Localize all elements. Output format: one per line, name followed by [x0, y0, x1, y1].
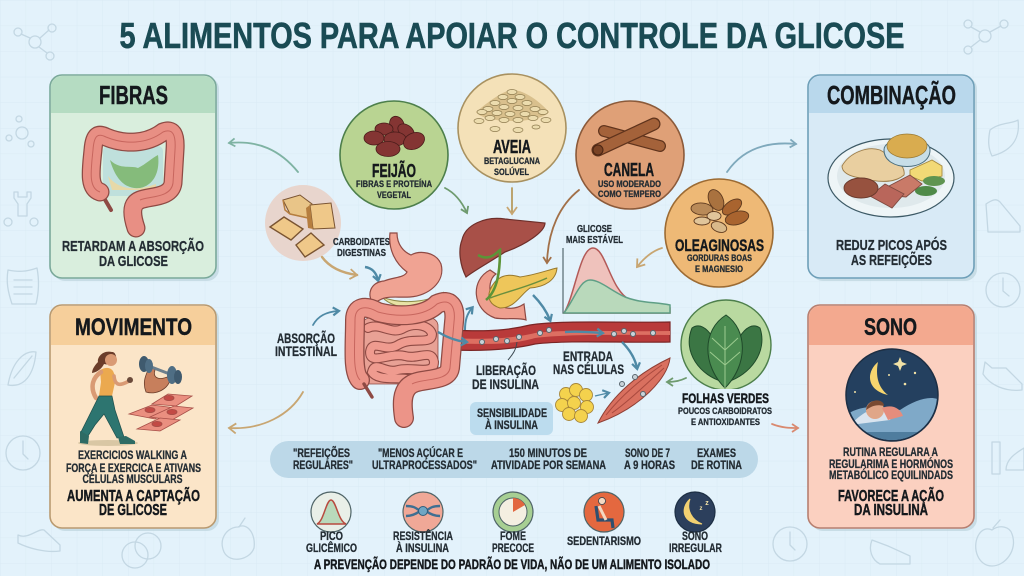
label: absorção intestinal: ABSORÇÃO [277, 331, 335, 346]
risk: sedentarismo: SEDENTARISMO [567, 536, 641, 548]
footer message: A PREVENÇÃO DEPENDE DO PADRÃO DE VIDA, NÃO DE UM ALIMENTO ISOLADO [314, 557, 710, 572]
text: oleaginosas: GORDURAS BOAS [687, 253, 752, 263]
text: oleaginosas [675, 236, 764, 274]
arrow: aveia to liver [511, 188, 513, 214]
habit: menos açúcar: "MENOS AÇÚCAR E [378, 447, 463, 460]
risk: resistência à insulina: À INSULINA [396, 542, 449, 555]
text: sono description [829, 445, 953, 482]
text: oleaginosas: OLEAGINOSAS [675, 236, 764, 255]
icon: balanced plate [828, 134, 954, 217]
text: movimento effect: DE GLICOSE [99, 502, 167, 519]
label: entrada nas células [553, 348, 624, 377]
text: movimento description: EXERCICIOS WALKING A [78, 448, 187, 462]
risk: sono irregular [669, 492, 723, 555]
icon: pancreas and duodenum [476, 250, 557, 320]
icon: cinnamon sticks [593, 124, 660, 155]
label: absorção intestinal [275, 331, 337, 359]
icon: colon with fibre gel [91, 131, 175, 228]
text: movimento effect [67, 485, 200, 519]
label: carboidates digestinas: CARBOIDATES [333, 237, 390, 248]
icon: nuts [691, 187, 750, 234]
habit: exames [691, 448, 742, 472]
arrow: pancreas to vessel [533, 295, 550, 320]
risk: pico glicêmico [306, 492, 357, 555]
text: sono description: REGULARIMA E HORMÓNOS [829, 456, 953, 471]
text: sono description: METABÓLICO EQUILINDADS [829, 467, 953, 482]
text: oleaginosas: E MAGNESIO [695, 264, 743, 274]
text: combinação effect: REDUZ PICOS APÓS [836, 236, 947, 254]
text: sono effect [838, 485, 944, 519]
arrow: fat to muscle [595, 393, 608, 396]
food: folhas verdes [678, 300, 772, 428]
text: aveia: BETAGLUCANA [484, 156, 540, 167]
callout: sensibilidade à insulina: SENSIBILIDADE [477, 408, 547, 420]
chart: glicose curves [563, 224, 670, 313]
habit: atividade: 150 MINUTOS DE [509, 448, 587, 460]
risk: sono irregular: IRREGULAR [669, 543, 723, 555]
food circle: carboidratos [265, 185, 341, 261]
icon: arm with dumbbell [139, 356, 182, 393]
arrow: to movimento [229, 392, 303, 428]
text: sono description: RUTINA REGULARA A [843, 445, 938, 459]
arrow: intestine to vessel [438, 332, 466, 342]
habit: atividade [491, 448, 606, 472]
pointer: insulin to vessel [508, 342, 517, 360]
label: glicose mais estável: GLICOSE [577, 224, 612, 235]
text: folhas verdes: POUCOS CARBOIDRATOS [678, 406, 772, 417]
icon: sleeping person at night [846, 349, 940, 445]
text: canela: USO MODERADO [598, 179, 661, 190]
text: feijão [356, 160, 432, 201]
text: fibras effect: RETARDAM A ABSORÇÃO [62, 237, 204, 255]
label: entrada nas células: ENTRADA [563, 348, 613, 364]
arrow: flow in vessel [565, 332, 602, 333]
risk: resistência à insulina: RESISTÊNCIA [393, 530, 453, 543]
risk: pico glicêmico: GLICÊMICO [306, 542, 357, 555]
icon: muscle [598, 358, 670, 423]
arrow: to combinação [727, 143, 796, 172]
text: sono effect: FAVORECE A AÇÃO [838, 485, 944, 505]
arrow: carbs to stomach [322, 257, 357, 275]
text: canela [598, 160, 661, 200]
habit: refeições regulares [293, 447, 353, 472]
icon: blood vessel with glucose [452, 322, 670, 350]
habit: refeições regulares: "REFEIÇÕES [293, 447, 350, 460]
icon: oat pile [474, 90, 551, 132]
risk: fome precoce: FOME [500, 531, 526, 543]
label: liberação de insulina [472, 361, 539, 392]
arrow: vessel to muscle [622, 342, 637, 368]
panel: movimento [50, 305, 219, 531]
risk: sono irregular: z [700, 506, 702, 512]
risk: sono irregular: SONO [682, 531, 708, 543]
food circle: canela [576, 101, 684, 209]
label: glicose mais estável [566, 224, 623, 246]
text: folhas verdes: FOLHAS VERDES [682, 390, 769, 406]
heading: movimento: MOVIMENTO [75, 314, 192, 341]
icon: liver [460, 218, 545, 277]
text: folhas verdes: E ANTIOXIDANTES [691, 417, 760, 428]
label: carboidates digestinas: DIGESTINAS [337, 248, 386, 259]
arrow: vessel to pancreas [465, 308, 472, 330]
label: absorção intestinal: INTESTINAL [275, 344, 337, 359]
risk: sedentarismo [567, 492, 641, 548]
text: movimento description: CÉLULAS MUSCULARS [82, 471, 182, 486]
habit: sono [624, 448, 675, 472]
habit: sono: A 9 HORAS [624, 460, 675, 472]
arrow: feijão to liver [445, 188, 467, 213]
label: liberação de insulina: DE INSULINA [472, 376, 539, 392]
panel: sono [808, 305, 977, 531]
text: feijão: FEIJÃO [372, 160, 416, 181]
text: aveia [484, 137, 540, 178]
label: carboidates digestinas [333, 237, 390, 259]
icon: fat cells [556, 384, 594, 422]
text: folhas verdes [678, 390, 772, 428]
habit: exames: EXAMES [697, 448, 736, 460]
text: aveia: AVEIA [493, 137, 531, 157]
food circle: aveia [458, 74, 566, 182]
panel: fibras [50, 75, 219, 281]
text: feijão: FIBRAS E PROTEÍNA [356, 179, 432, 190]
callout: sensibilidade à insulina [470, 402, 553, 435]
label: entrada nas células: NAS CÉLULAS [553, 361, 624, 377]
text: aveia: SOLÚVEL [494, 166, 529, 178]
risk: pico glicêmico: PICO [320, 531, 343, 543]
food circle: feijão [340, 101, 448, 209]
arrow: oleaginosas to chart [637, 248, 662, 267]
arrow: canela to pancreas [547, 190, 579, 263]
text: movimento description [66, 448, 201, 486]
panel: combinação [808, 75, 977, 281]
habit: sono: SONO DE 7 [625, 448, 670, 460]
arrow: to fibras [229, 142, 298, 172]
risk: sono irregular: z [705, 500, 709, 507]
habit: menos açúcar [372, 447, 477, 472]
text: movimento effect: AUMENTA A CAPTAÇÃO [67, 485, 200, 505]
icon: woman walking [78, 352, 138, 446]
risk: fome precoce: PRECOCE [492, 543, 534, 555]
arrow: absorção to intestine [313, 311, 338, 325]
label: glicose mais estável: MAIS ESTÁVEL [566, 233, 623, 246]
arrow: folhas to muscle [667, 378, 686, 382]
callout: sensibilidade à insulina: À INSULINA [485, 419, 538, 432]
arrow: digestion [365, 267, 378, 280]
text: combinação effect: AS REFEIÇÕES [851, 251, 932, 269]
arrow: to sono [772, 424, 798, 428]
icon: intestines [354, 302, 454, 418]
text: canela: CANELA [604, 160, 654, 180]
heading: fibras: FIBRAS [99, 80, 168, 110]
icon: stomach [370, 233, 444, 307]
text: combinação effect [836, 236, 947, 269]
text: fibras effect: DA GLICOSE [99, 253, 168, 270]
text: sono effect: DA INSULINA [854, 502, 928, 519]
food circle: oleaginosas [665, 179, 773, 287]
habit: refeições regulares: REGULARES" [293, 460, 353, 472]
risk: fome precoce [492, 492, 534, 555]
icon: beans [364, 114, 427, 156]
text: feijão: VEGETAL [377, 190, 411, 201]
text: canela: COMO TEMPERO [598, 189, 661, 200]
habit: menos açúcar: ULTRAPROCESSADOS" [372, 460, 477, 472]
text: movimento description: FORÇA E EXERCICA E ATIVANS [66, 461, 201, 475]
habit: atividade: ATIVIDADE POR SEMANA [491, 460, 606, 472]
habits pill [270, 441, 758, 478]
icon: muscle cells [129, 394, 193, 431]
habit: exames: DE ROTINA [691, 460, 742, 472]
risk: resistência à insulina [393, 492, 453, 555]
label: liberação de insulina: LIBERAÇÃO [476, 361, 536, 378]
heading: combinação: COMBINAÇÃO [827, 80, 956, 110]
heading: sono: SONO [864, 314, 917, 341]
text: fibras effect [62, 237, 204, 270]
